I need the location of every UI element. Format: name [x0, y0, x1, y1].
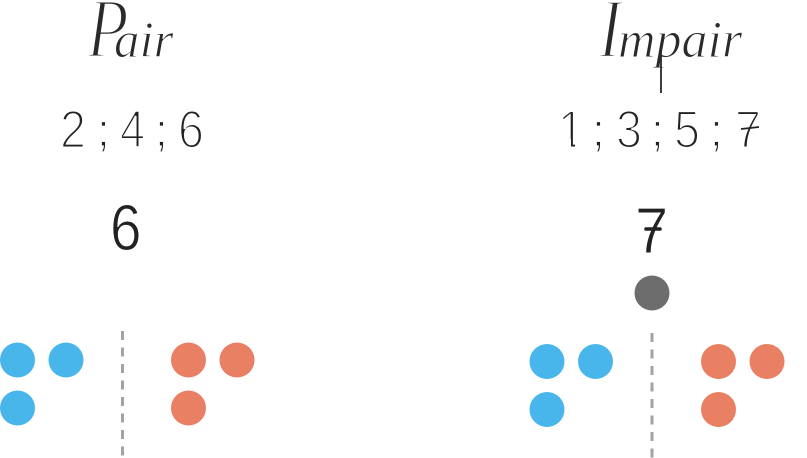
panel: impair [530, 0, 784, 458]
big number 7: 7 [635, 195, 668, 268]
even number list: 4 [120, 100, 145, 159]
big number 6: 6 [110, 191, 141, 264]
odd number list: 7 [735, 100, 761, 159]
blue dots [0, 342, 84, 426]
even number list [60, 100, 204, 159]
odd number list [558, 100, 761, 159]
even number list: 2 [60, 100, 86, 159]
heading: Pair: air [114, 13, 174, 69]
odd number list: ; [710, 104, 723, 156]
odd number list: 3 [616, 100, 642, 159]
even number list: ; [97, 104, 110, 156]
odd number list: 5 [674, 100, 700, 159]
grey extra dot [634, 276, 670, 310]
dashed divider [121, 331, 124, 458]
odd number list: ; [651, 104, 664, 156]
heading: Pair [86, 0, 174, 76]
even number list: 6 [178, 100, 204, 159]
heading: Impair: mpair [618, 12, 743, 69]
dashed divider [650, 333, 654, 458]
odd number list: 1 [558, 100, 584, 159]
red dots [701, 344, 784, 427]
red dots [171, 342, 254, 426]
odd number list: ; [592, 104, 605, 156]
even number list: ; [155, 104, 168, 156]
panel: pair [0, 0, 254, 458]
heading: Impair [597, 0, 743, 93]
blue dots [530, 344, 613, 427]
